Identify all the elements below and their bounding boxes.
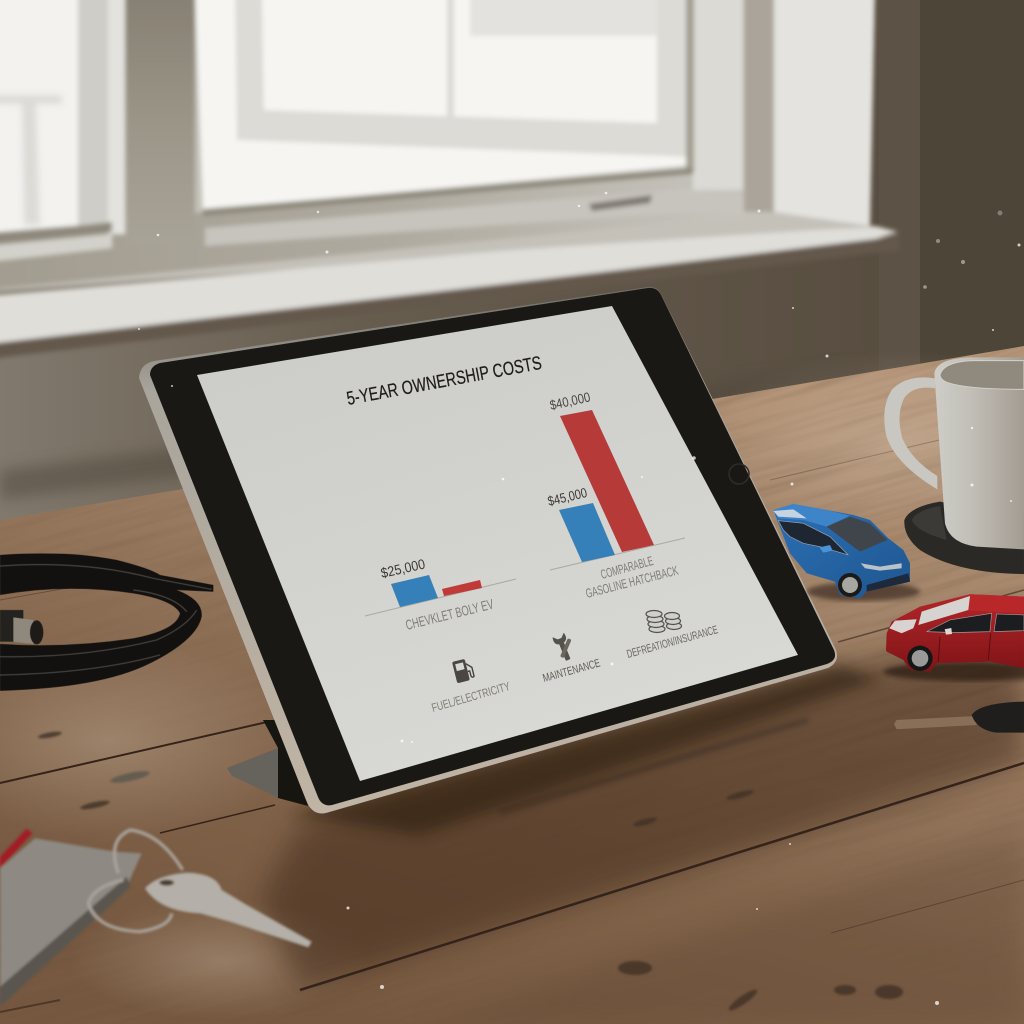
right frame grey <box>744 0 774 212</box>
saucer rim light <box>912 506 947 540</box>
roof <box>773 504 850 527</box>
label: fuel: FUEL/ELECTRICITY <box>430 679 512 715</box>
side windows <box>778 521 848 555</box>
category label line 1: COMPARABLE <box>599 553 655 582</box>
cable highlights <box>0 565 212 675</box>
car shadow <box>807 582 920 601</box>
right wall band <box>879 0 922 370</box>
saucer <box>904 502 1024 574</box>
plank joints <box>0 420 1024 1012</box>
coffee mug and saucer <box>884 357 1024 574</box>
tablet home button <box>729 464 749 484</box>
icon: coins <box>646 610 682 632</box>
icon: fuel pump <box>452 658 475 683</box>
window latch <box>589 195 652 211</box>
red pen <box>0 829 32 868</box>
wooden table <box>0 346 1024 1024</box>
icon: wrench <box>552 631 578 662</box>
bar: red <box>442 580 482 596</box>
silver key <box>145 873 312 947</box>
right frame shadow line <box>686 0 694 172</box>
left frame strip <box>78 0 108 226</box>
sill underside <box>0 236 900 359</box>
left pane sill shadow <box>0 222 112 244</box>
tablet stand <box>227 748 278 798</box>
category label line 2: GASOLINE HATCHBACK <box>584 563 680 601</box>
windshield <box>827 517 887 552</box>
chart: comparable gasoline hatchback <box>546 389 685 601</box>
key blade <box>894 716 977 729</box>
toy car: blue <box>773 504 920 601</box>
body <box>886 594 1024 672</box>
wheel <box>838 573 862 597</box>
right frame light <box>693 0 743 190</box>
cable plug <box>0 610 43 644</box>
bottom rail shadow <box>203 168 693 216</box>
tablet screen <box>197 306 798 781</box>
wheel <box>907 646 933 671</box>
key fob <box>972 702 1024 733</box>
mullion light strip <box>108 0 125 234</box>
dark plank under tablet <box>260 625 1024 990</box>
side windows <box>927 613 1024 633</box>
windshield <box>918 596 970 625</box>
mug body <box>934 357 1024 549</box>
cable coil <box>0 553 213 691</box>
key hole <box>159 880 174 886</box>
side mirror <box>819 545 833 553</box>
side mirror <box>945 628 952 635</box>
dark streak <box>500 720 808 812</box>
window reveal <box>774 0 875 226</box>
window <box>0 0 900 359</box>
label: maintenance: MAINTENANCE <box>542 657 602 685</box>
car key <box>894 702 1024 733</box>
upper window glass <box>262 0 657 123</box>
value label 40k: $40,000 <box>548 389 592 413</box>
mug inner <box>940 361 1024 389</box>
window mullion <box>125 0 195 244</box>
body <box>773 504 910 598</box>
left window pane <box>0 0 85 233</box>
bar: blue tall <box>559 503 615 562</box>
main window pane <box>195 0 693 210</box>
background wall <box>0 0 1024 530</box>
charging cable <box>0 553 213 691</box>
floating dust particles <box>138 192 1020 1005</box>
value label 45k: $45,000 <box>546 485 589 509</box>
rail highlight <box>0 234 112 262</box>
value label: $25,000 <box>379 556 427 581</box>
rail highlight right <box>205 188 760 246</box>
front plank shading <box>420 830 1024 1024</box>
window sill <box>0 226 898 344</box>
bottom rail <box>0 172 775 290</box>
glass mullion <box>447 0 454 118</box>
notebook, pen and keys <box>0 829 312 1007</box>
title: 5-YEAR OWNERSHIP COSTS <box>345 353 544 410</box>
chart: Chevrolet Bolt EV <box>365 556 516 633</box>
wall panel shading <box>0 365 880 500</box>
dark right wall <box>920 0 1024 370</box>
toy car: red <box>883 594 1024 681</box>
mug handle <box>884 377 937 489</box>
key rings <box>88 830 183 932</box>
table highlights <box>700 350 1024 530</box>
bar: red tall <box>560 410 654 552</box>
car shadow <box>883 662 1024 681</box>
tablet bezel <box>150 288 835 805</box>
bonnet <box>889 619 917 633</box>
upper right glass haze <box>470 0 657 36</box>
sash left stile <box>235 0 690 157</box>
bumper <box>867 573 910 592</box>
label: depreciation: DEFREATION/INSURANCE <box>626 624 720 661</box>
roof <box>968 594 1024 613</box>
tablet stand support <box>263 720 308 806</box>
door line <box>938 633 991 662</box>
roof reflection <box>773 509 807 518</box>
tablet silver edge <box>139 287 837 813</box>
notebook spine edge <box>0 877 131 1007</box>
wood knots <box>38 730 903 1013</box>
notebook <box>0 838 142 1002</box>
left pane muntin <box>0 95 62 225</box>
tablet <box>139 287 837 813</box>
wood grain <box>0 346 1024 1024</box>
bar: blue <box>391 575 438 607</box>
category label: CHEVKLET BOLY EV <box>404 596 495 633</box>
tablet shadow <box>290 665 880 835</box>
headlights <box>861 563 902 571</box>
